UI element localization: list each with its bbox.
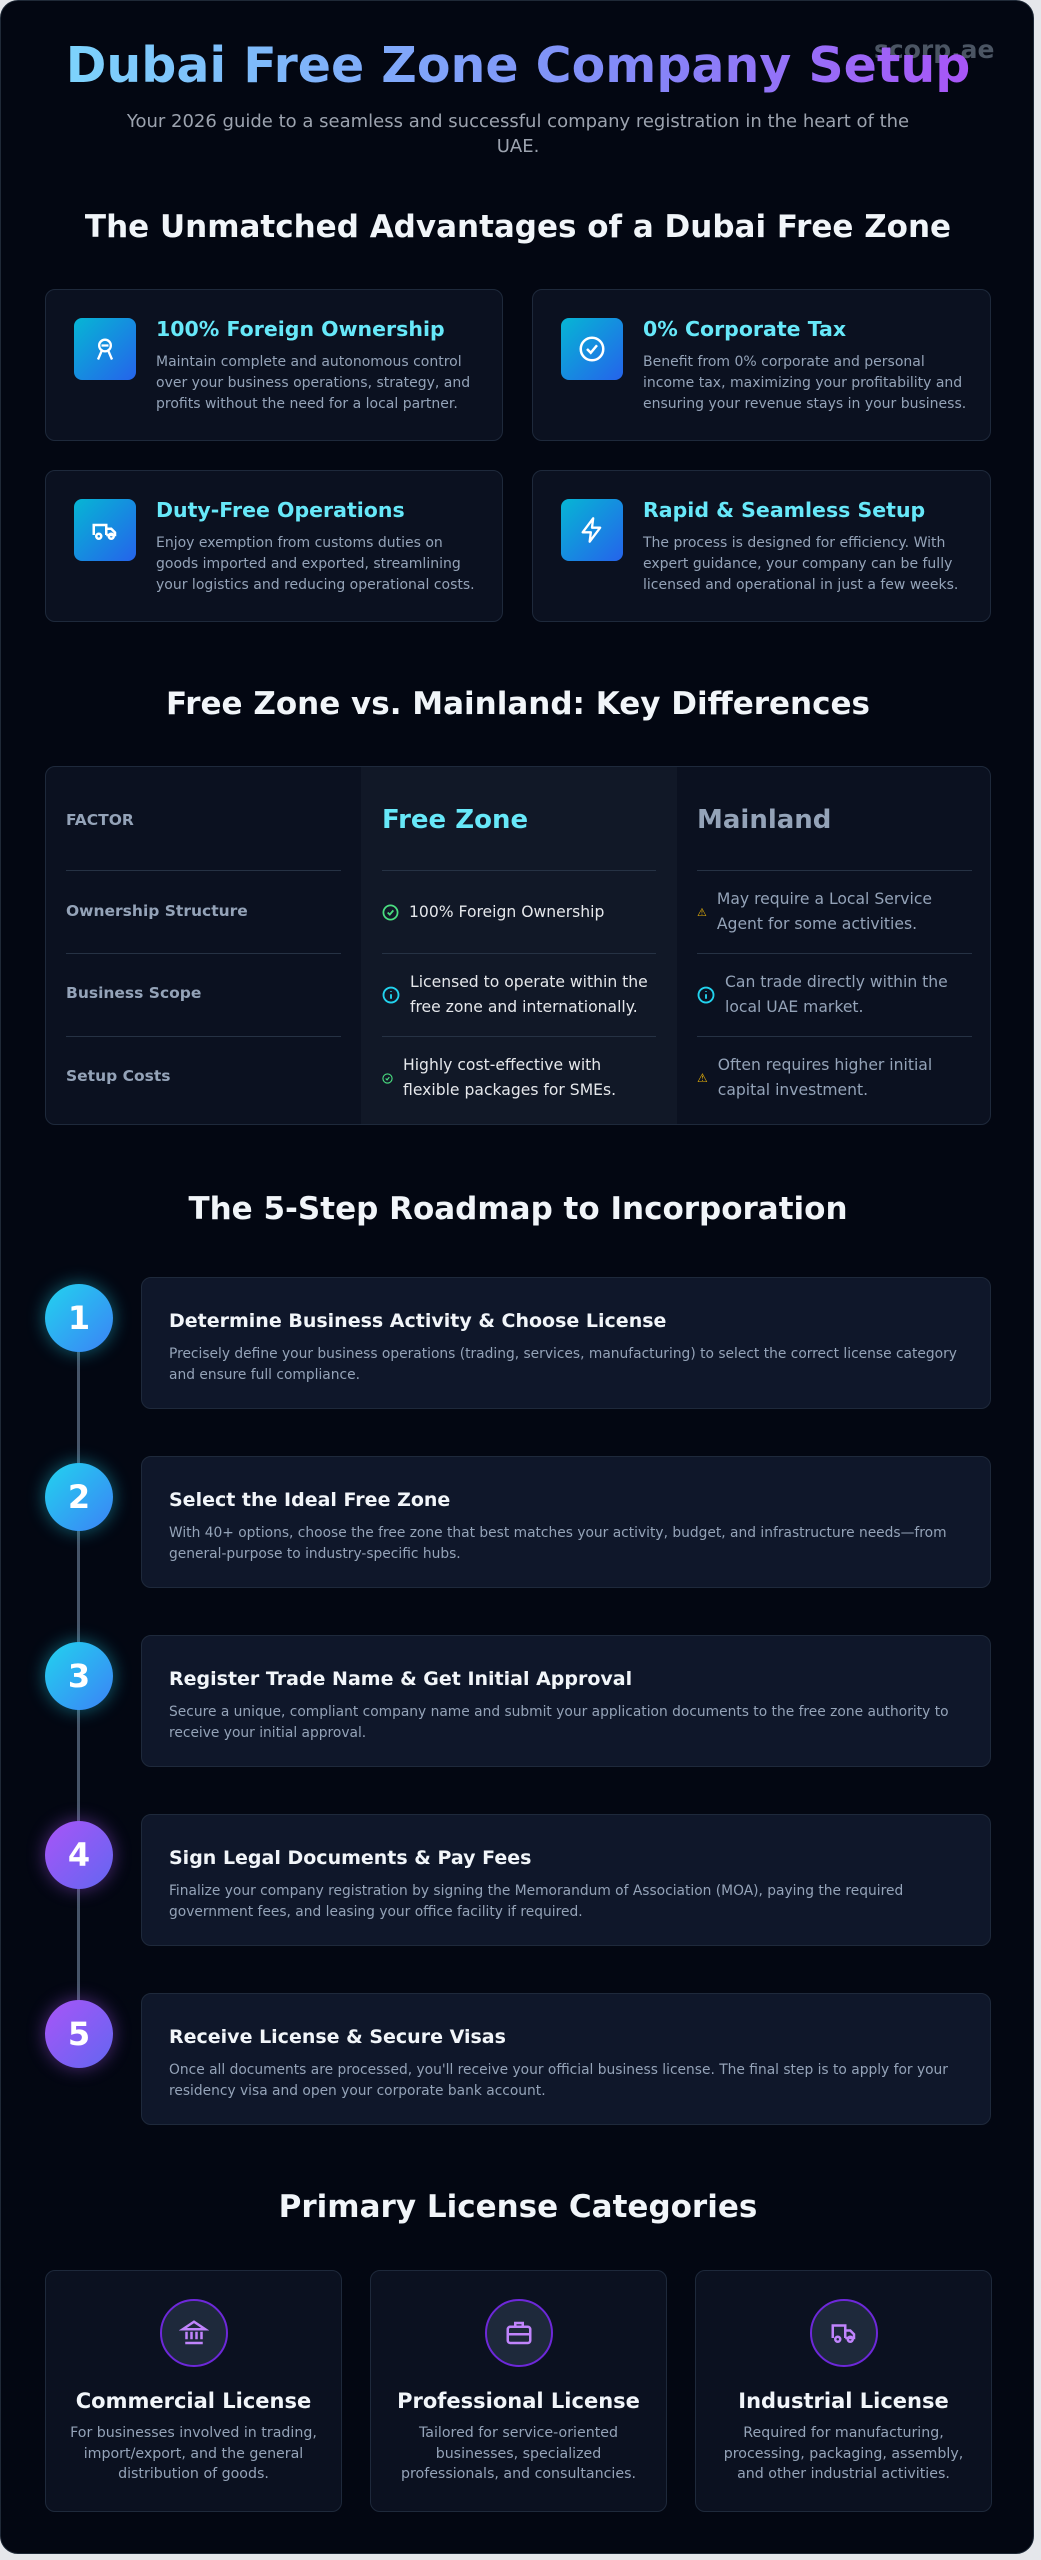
step 2: Select the Ideal Free Zone [169, 1489, 450, 1511]
step 5: Receive License & Secure Visas [169, 2026, 506, 2048]
card: rapid setup [532, 470, 991, 622]
comparison table: Often requires higher initial capital investment. [718, 1056, 932, 1099]
icon: truck [810, 2299, 878, 2367]
license: professional [370, 2270, 667, 2512]
step 5 [34, 1989, 991, 2125]
license: industrial: Required for manufacturing, processing, packaging, assembly, and other industrial activities. [724, 2425, 963, 2482]
step 2: 2 [68, 1478, 90, 1516]
step 5: 5 [68, 2015, 90, 2053]
card: rapid setup: Rapid & Seamless Setup [643, 498, 925, 522]
icon: bank [160, 2299, 228, 2367]
heading: advantages: The Unmatched Advantages of a Dubai Free Zone [85, 209, 951, 245]
heading: roadmap: The 5-Step Roadmap to Incorporation [188, 1191, 848, 1227]
license: industrial [695, 2270, 992, 2512]
header: factor: FACTOR [66, 811, 134, 829]
comparison table: ⚠ [697, 906, 707, 918]
step 1: 1 [68, 1299, 90, 1337]
step 1 [34, 1273, 991, 1409]
icon: ownership [74, 318, 136, 380]
card: duty-free [45, 470, 503, 622]
license: industrial: Industrial License [738, 2389, 949, 2413]
card: rapid setup: The process is designed for efficiency. With expert guidance, your company can be fully licensed and operational in just a few weeks. [643, 535, 958, 593]
comparison table: Highly cost-effective with flexible packages for SMEs. [403, 1056, 616, 1099]
card: foreign ownership: Maintain complete and autonomous control over your business operations, strategy, and profits without the need for a local partner. [156, 354, 470, 412]
comparison table: Licensed to operate within the free zone and internationally. [410, 973, 648, 1016]
icon: briefcase [485, 2299, 553, 2367]
comparison table: ⚠ [697, 1070, 708, 1084]
card: corporate tax: Benefit from 0% corporate and personal income tax, maximizing your profitability and ensuring your revenue stays in your business. [643, 354, 966, 412]
comparison table: 100% Foreign Ownership [409, 902, 604, 920]
license: commercial [45, 2270, 342, 2512]
card: duty-free: Enjoy exemption from customs duties on [156, 535, 443, 551]
license: professional: Tailored for service-oriented businesses, specialized professionals, and consultancies. [401, 2425, 636, 2482]
step 2: With 40+ options, choose the free zone that best matches your activity, budget, and infrastructure needs—from general-purpose to industry-specific hubs. [169, 1525, 947, 1562]
step 5: Once all documents are processed, you'll receive your official business license. The final step is to apply for your residency visa and open your corporate bank account. [169, 2062, 948, 2099]
header: mainland: Mainland [697, 805, 831, 835]
watermark: scorp.ae [874, 35, 994, 64]
card: duty-free: goods imported and exported, streamlining [156, 556, 461, 572]
row: ownership: Ownership Structure [66, 902, 248, 920]
step 1: Precisely define your business operations (trading, services, manufacturing) to select the correct license category and ensure full compliance. [169, 1346, 957, 1383]
card: corporate tax: 0% Corporate Tax [643, 317, 846, 341]
step 1: Determine Business Activity & Choose License [169, 1310, 666, 1332]
license: professional: Professional License [397, 2389, 640, 2413]
card: duty-free: your logistics and reducing operational costs. [156, 577, 475, 593]
header: free zone: Free Zone [382, 805, 528, 835]
heading: comparison: Free Zone vs. Mainland: Key Differences [166, 686, 870, 722]
step 4: Finalize your company registration by signing the Memorandum of Association (MOA), paying the required government fees, and leasing your office facility if required. [169, 1883, 903, 1920]
step 2 [34, 1452, 991, 1588]
card: foreign ownership [45, 289, 503, 441]
row: costs: Setup Costs [66, 1067, 170, 1085]
step 3: Secure a unique, compliant company name and submit your application documents to the free zone authority to receive your initial approval. [169, 1704, 949, 1741]
icon: lightning [561, 499, 623, 561]
card: duty-free: Duty-Free Operations [156, 498, 405, 522]
subtitle: Your 2026 guide to a seamless and successful company registration in the heart of the UAE. [127, 111, 909, 157]
title: Dubai Free Zone Company Setup [66, 37, 970, 94]
comparison table [45, 766, 991, 1125]
comparison table: Can trade directly within the local UAE market. [725, 973, 948, 1016]
step 4: Sign Legal Documents & Pay Fees [169, 1847, 531, 1869]
icon: check circle [561, 318, 623, 380]
icon: truck [74, 499, 136, 561]
row: scope: Business Scope [66, 984, 201, 1002]
license: commercial: Commercial License [76, 2389, 311, 2413]
heading: licenses: Primary License Categories [279, 2189, 757, 2225]
step 3 [34, 1631, 991, 1767]
step 4 [34, 1810, 991, 1946]
step 4: 4 [68, 1836, 90, 1874]
card: corporate tax [532, 289, 991, 441]
step 3: 3 [68, 1657, 90, 1695]
step 3: Register Trade Name & Get Initial Approval [169, 1668, 632, 1690]
comparison table: May require a Local Service Agent for some activities. [717, 890, 932, 933]
timeline line [77, 1341, 80, 2031]
card: foreign ownership: 100% Foreign Ownership [156, 317, 445, 341]
license: commercial: For businesses involved in trading, import/export, and the general distribution of goods. [70, 2425, 317, 2482]
